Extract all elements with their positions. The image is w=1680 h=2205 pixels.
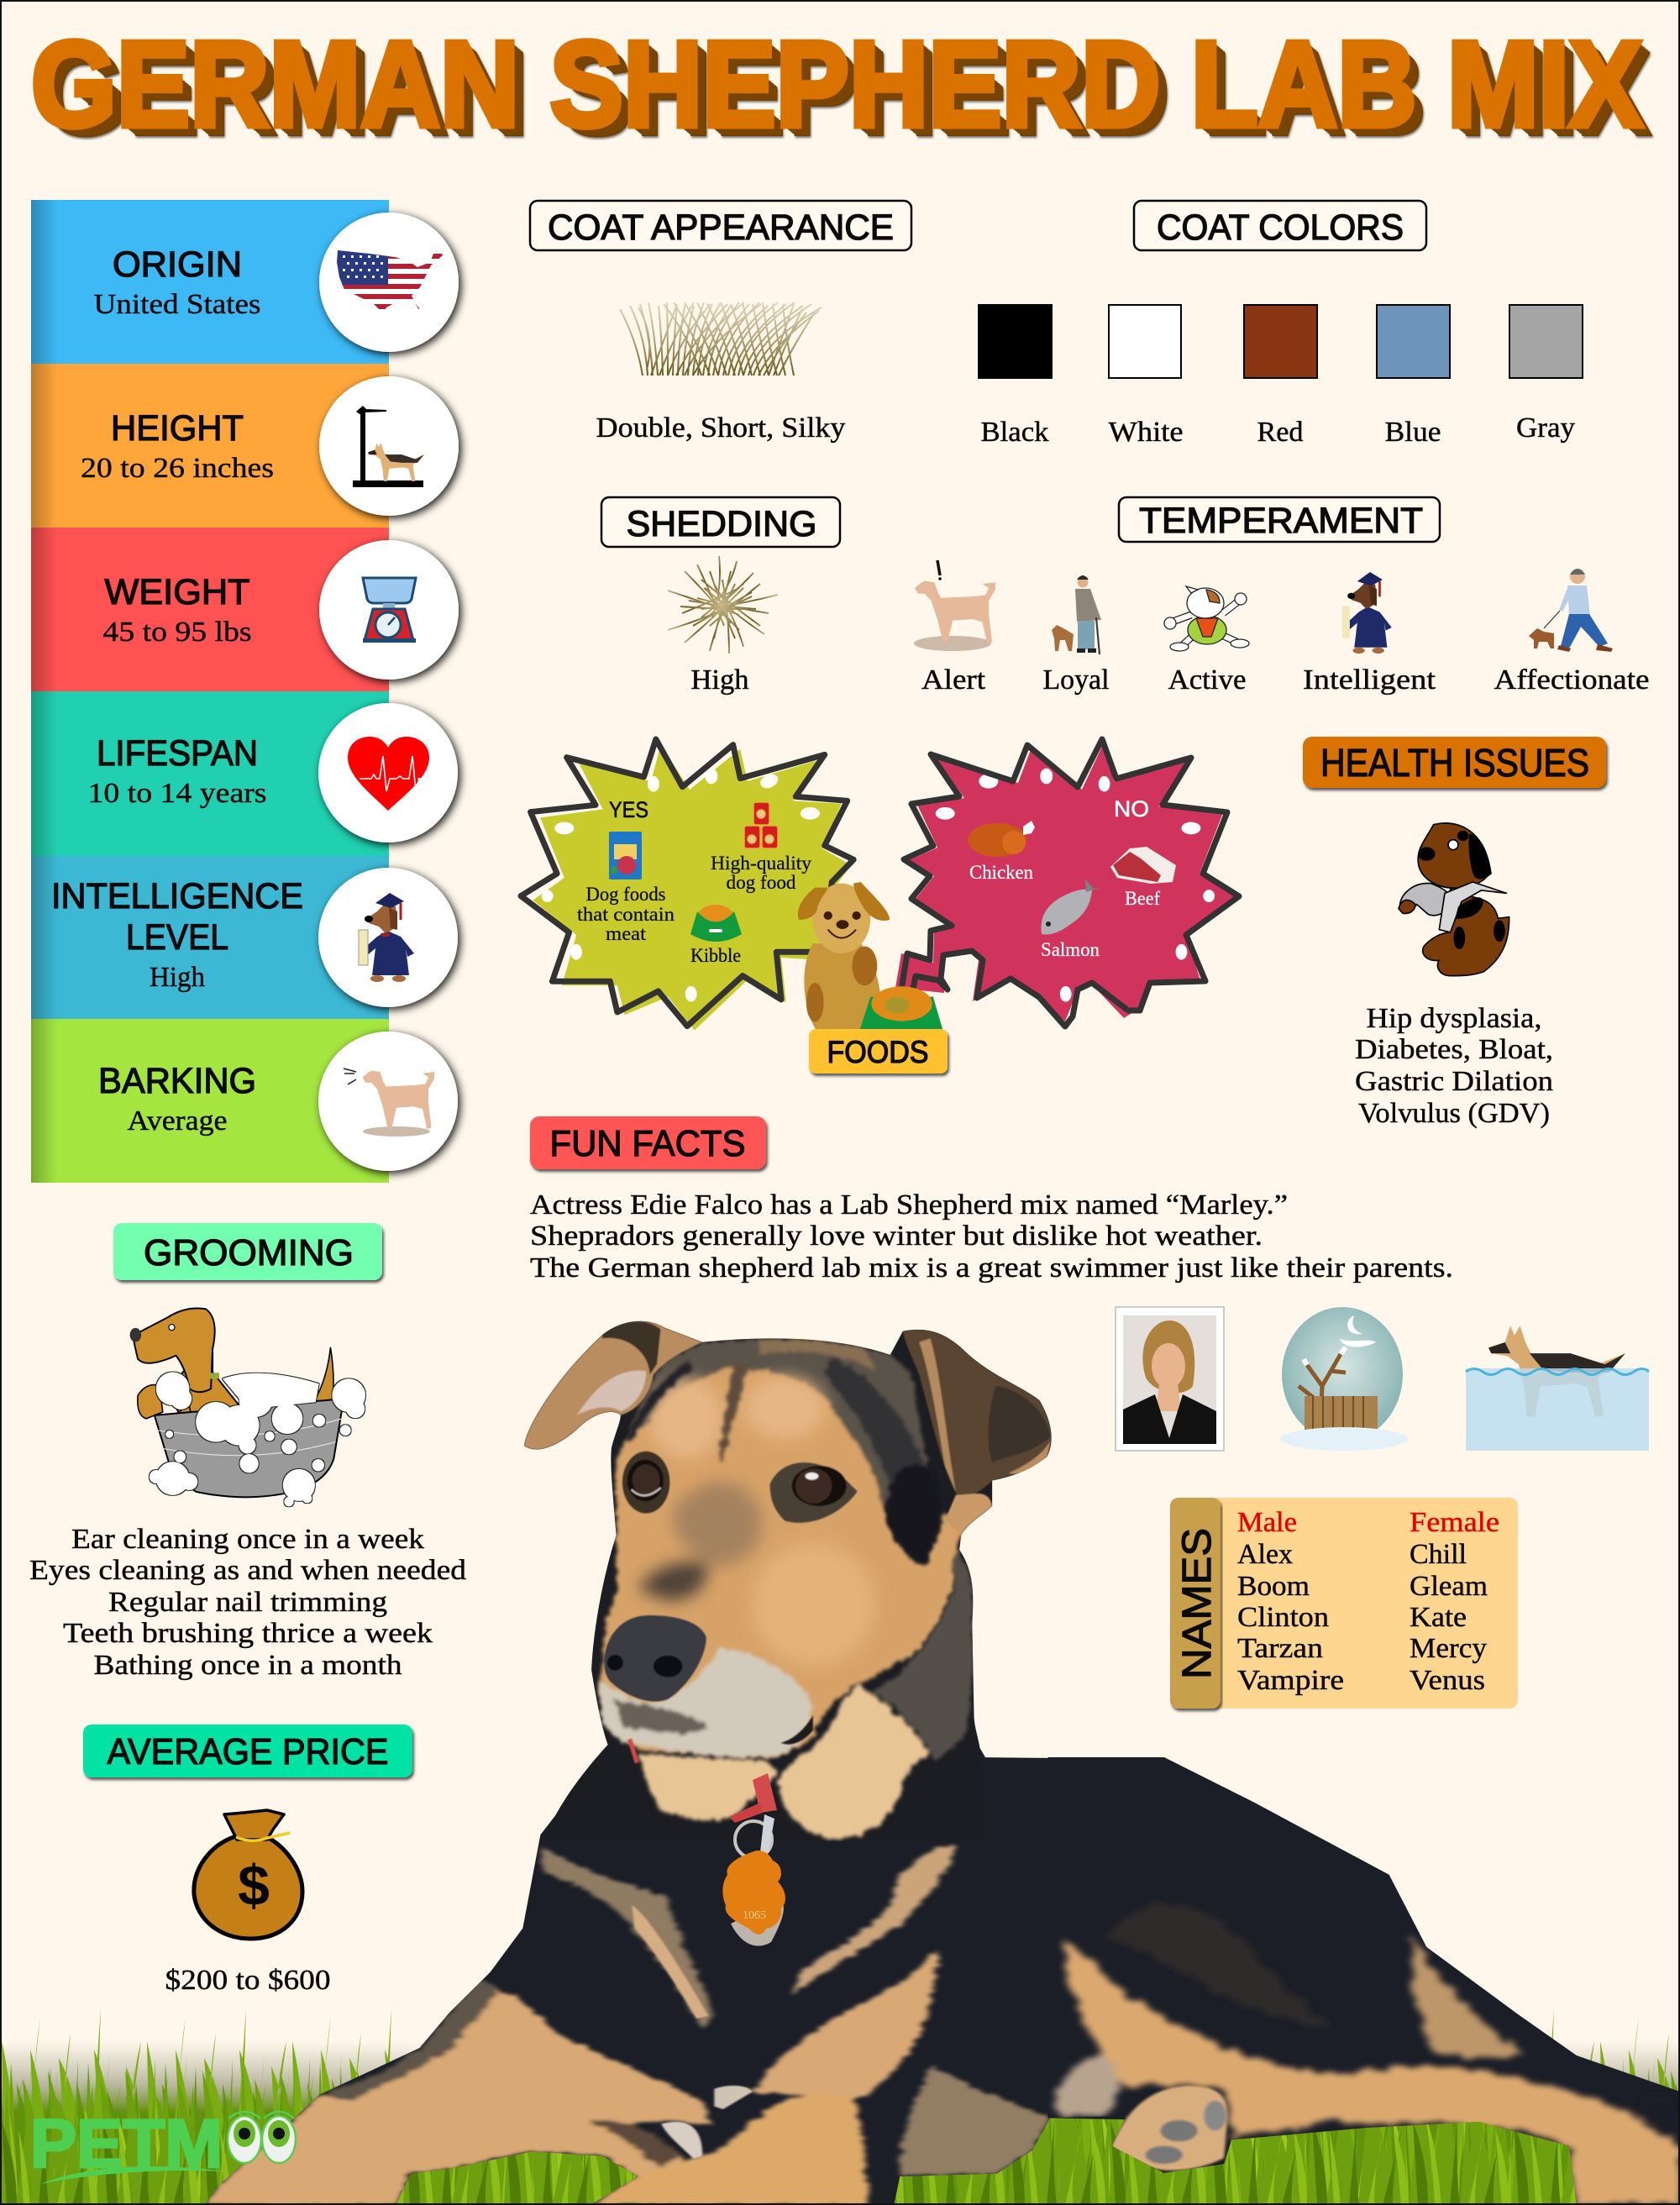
icon: intelligent graduate dog — [1342, 572, 1392, 654]
icon: kibble bowl — [690, 905, 742, 942]
text: fun facts — [530, 1189, 1453, 1284]
text: grooming: Regular nail trimming — [108, 1587, 387, 1618]
text: foods yes: that contain — [577, 904, 675, 925]
icon: beef — [1110, 847, 1176, 884]
swatches: coat colors — [979, 305, 1583, 378]
text: foods no: Salmon — [1041, 939, 1100, 960]
item: intelligence level: INTELLIGENCE — [51, 876, 303, 916]
item: weight — [102, 540, 459, 680]
panel: attribute bars — [31, 200, 389, 1183]
title: GERMAN SHEPHERD LAB MIX — [31, 16, 1642, 152]
heading: shedding: SHEDDING — [627, 504, 816, 544]
panel: names: Venus — [1410, 1665, 1485, 1696]
labels: coat colors: Red — [1257, 417, 1304, 448]
button: foods — [809, 1029, 948, 1074]
labels: coat colors: White — [1109, 417, 1183, 448]
item: barking: BARKING — [98, 1061, 256, 1101]
dog head — [524, 1320, 1052, 1841]
panel: names: Gleam — [1410, 1571, 1488, 1602]
panel: names: NAMES — [1175, 1528, 1220, 1679]
icon: affectionate man walking dog — [1529, 569, 1613, 652]
icon: dog in bath — [130, 1309, 365, 1506]
logo: petmoo: PETM — [30, 2106, 223, 2182]
labels: coat colors: Gray — [1516, 412, 1575, 444]
text: foods no: NO — [1114, 796, 1149, 822]
dog hind body — [1047, 1757, 1678, 2203]
text: price: $200 to $600 — [165, 1965, 331, 1996]
dog collar and tag: 1065 — [743, 1909, 766, 1922]
text: foods yes: YES — [609, 797, 648, 822]
labels: temperament: Alert — [921, 664, 986, 696]
text: grooming: Bathing once in a month — [94, 1650, 402, 1681]
text: foods yes: Dog foods — [586, 884, 666, 905]
panel: names: Female — [1410, 1507, 1499, 1538]
background: grass — [0, 2008, 1680, 2205]
item: weight: 45 to 95 lbs — [102, 617, 252, 648]
item: lifespan: LIFESPAN — [97, 733, 258, 774]
icon: swimming dog — [1466, 1326, 1649, 1451]
item: lifespan: 10 to 14 years — [87, 778, 267, 809]
labels: temperament: Active — [1168, 664, 1247, 696]
button: fun facts — [530, 1116, 766, 1169]
text: fun facts: Actress Edie Falco has a Lab Shepherd mix named “Marley.” — [530, 1189, 1288, 1221]
button: grooming: GROOMING — [144, 1232, 354, 1273]
text: grooming: Ear cleaning once in a week — [71, 1524, 424, 1555]
text: health issues — [1355, 1003, 1553, 1129]
text: foods yes — [577, 797, 812, 966]
item: intelligence level: LEVEL — [126, 917, 228, 958]
icon: heart with pulse — [348, 737, 432, 811]
panel: names — [1170, 1498, 1518, 1709]
icon: money bag — [194, 1810, 302, 1939]
text: foods yes: dog food — [726, 872, 796, 893]
icon: graduate dog — [359, 893, 414, 982]
icon: injured dog — [1399, 823, 1509, 976]
icon: active cartoon dog — [1164, 586, 1249, 651]
text: grooming: Eyes cleaning as and when needed — [29, 1555, 466, 1586]
labels: temperament — [921, 664, 1650, 696]
labels: temperament: Affectionate — [1494, 664, 1650, 696]
panel: names: Clinton — [1237, 1602, 1329, 1633]
panel: foods no burst — [895, 739, 1239, 1026]
photo: actress portrait — [1116, 1307, 1224, 1451]
icon: dog on height measure — [353, 406, 424, 487]
button: fun facts: FUN FACTS — [549, 1123, 746, 1164]
labels: coat colors — [981, 412, 1575, 448]
text: foods no: Chicken — [969, 862, 1033, 883]
panel: names: Mercy — [1410, 1633, 1487, 1664]
text: foods yes: High-quality — [711, 853, 812, 874]
text: fun facts: The German shepherd lab mix is a great swimmer just like their parents. — [530, 1252, 1453, 1284]
heading: coat appearance: COAT APPEARANCE — [548, 207, 894, 248]
text: grooming — [29, 1524, 466, 1681]
panel: names: Chill — [1410, 1539, 1467, 1570]
icon: snow globe — [1280, 1307, 1408, 1451]
labels: temperament: Loyal — [1043, 664, 1109, 696]
item: weight: WEIGHT — [104, 572, 250, 612]
dog chest and forelegs — [202, 1747, 1126, 2205]
panel: names: Alex — [1237, 1539, 1293, 1570]
icon: roast chicken — [968, 821, 1035, 857]
icon: dog food bag — [609, 832, 642, 879]
panel: names: Boom — [1237, 1571, 1310, 1602]
label: shedding: High — [690, 664, 749, 696]
panel: names: Male — [1237, 1507, 1297, 1538]
icon: coat hair — [620, 302, 822, 375]
text: health issues: Hip dysplasia, — [1366, 1003, 1542, 1034]
panel: foods yes burst — [521, 739, 853, 1031]
labels: coat colors: Black — [981, 417, 1048, 448]
item: intelligence level — [51, 868, 458, 1007]
icon: kitchen scale — [363, 578, 416, 643]
dog collar and tag — [722, 1773, 785, 1946]
photo: german shepherd lab mix dog — [202, 1302, 1680, 2205]
icon: USA flag map — [337, 250, 443, 309]
button: grooming — [113, 1223, 382, 1280]
icon: cartoon dog with bowl — [798, 882, 942, 1031]
item: height — [81, 376, 459, 516]
item: barking — [98, 1032, 458, 1171]
icon: alert dog — [914, 560, 995, 651]
panel: names: Kate — [1410, 1602, 1467, 1633]
icon: shedding hair — [668, 556, 778, 654]
icon: barking dog — [344, 1068, 434, 1137]
text: foods no: Beef — [1125, 888, 1160, 909]
heading: coat colors: COAT COLORS — [1157, 207, 1404, 248]
heading: temperament: TEMPERAMENT — [1139, 501, 1423, 541]
item: origin: United States — [94, 289, 260, 320]
text: fun facts: Shepradors generally love winter but dislike hot weather. — [530, 1221, 1263, 1252]
text: foods no — [969, 796, 1160, 960]
icon: salmon — [1041, 879, 1102, 934]
item: origin: ORIGIN — [113, 244, 242, 285]
icon: dog food cans — [744, 802, 778, 848]
text: health issues: Diabetes, Bloat, — [1355, 1034, 1553, 1065]
button: foods: FOODS — [827, 1035, 929, 1069]
item: height: 20 to 26 inches — [81, 453, 274, 484]
panel: names: Tarzan — [1237, 1633, 1323, 1664]
text: foods yes: meat — [606, 923, 647, 944]
heading: shedding — [601, 497, 840, 547]
labels: temperament: Intelligent — [1303, 664, 1436, 696]
text: foods yes: Kibble — [690, 945, 741, 966]
text: health issues: Gastric Dilation — [1355, 1066, 1553, 1097]
button: average price: AVERAGE PRICE — [108, 1731, 388, 1772]
panel: names: Vampire — [1237, 1665, 1344, 1696]
label: coat appearance: Double, Short, Silky — [596, 412, 845, 444]
icon: money bag: $ — [238, 1854, 270, 1918]
item: intelligence level: High — [150, 962, 205, 993]
item: lifespan — [87, 703, 458, 843]
item: origin — [94, 213, 459, 352]
item: height: HEIGHT — [111, 408, 244, 449]
text: grooming: Teeth brushing thrice a week — [63, 1618, 433, 1649]
button: health issues: HEALTH ISSUES — [1320, 741, 1589, 785]
item: barking: Average — [128, 1105, 227, 1137]
icon: loyal man and dog — [1052, 575, 1101, 654]
labels: coat colors: Blue — [1384, 417, 1441, 448]
text: health issues: Volvulus (GDV) — [1358, 1098, 1550, 1129]
